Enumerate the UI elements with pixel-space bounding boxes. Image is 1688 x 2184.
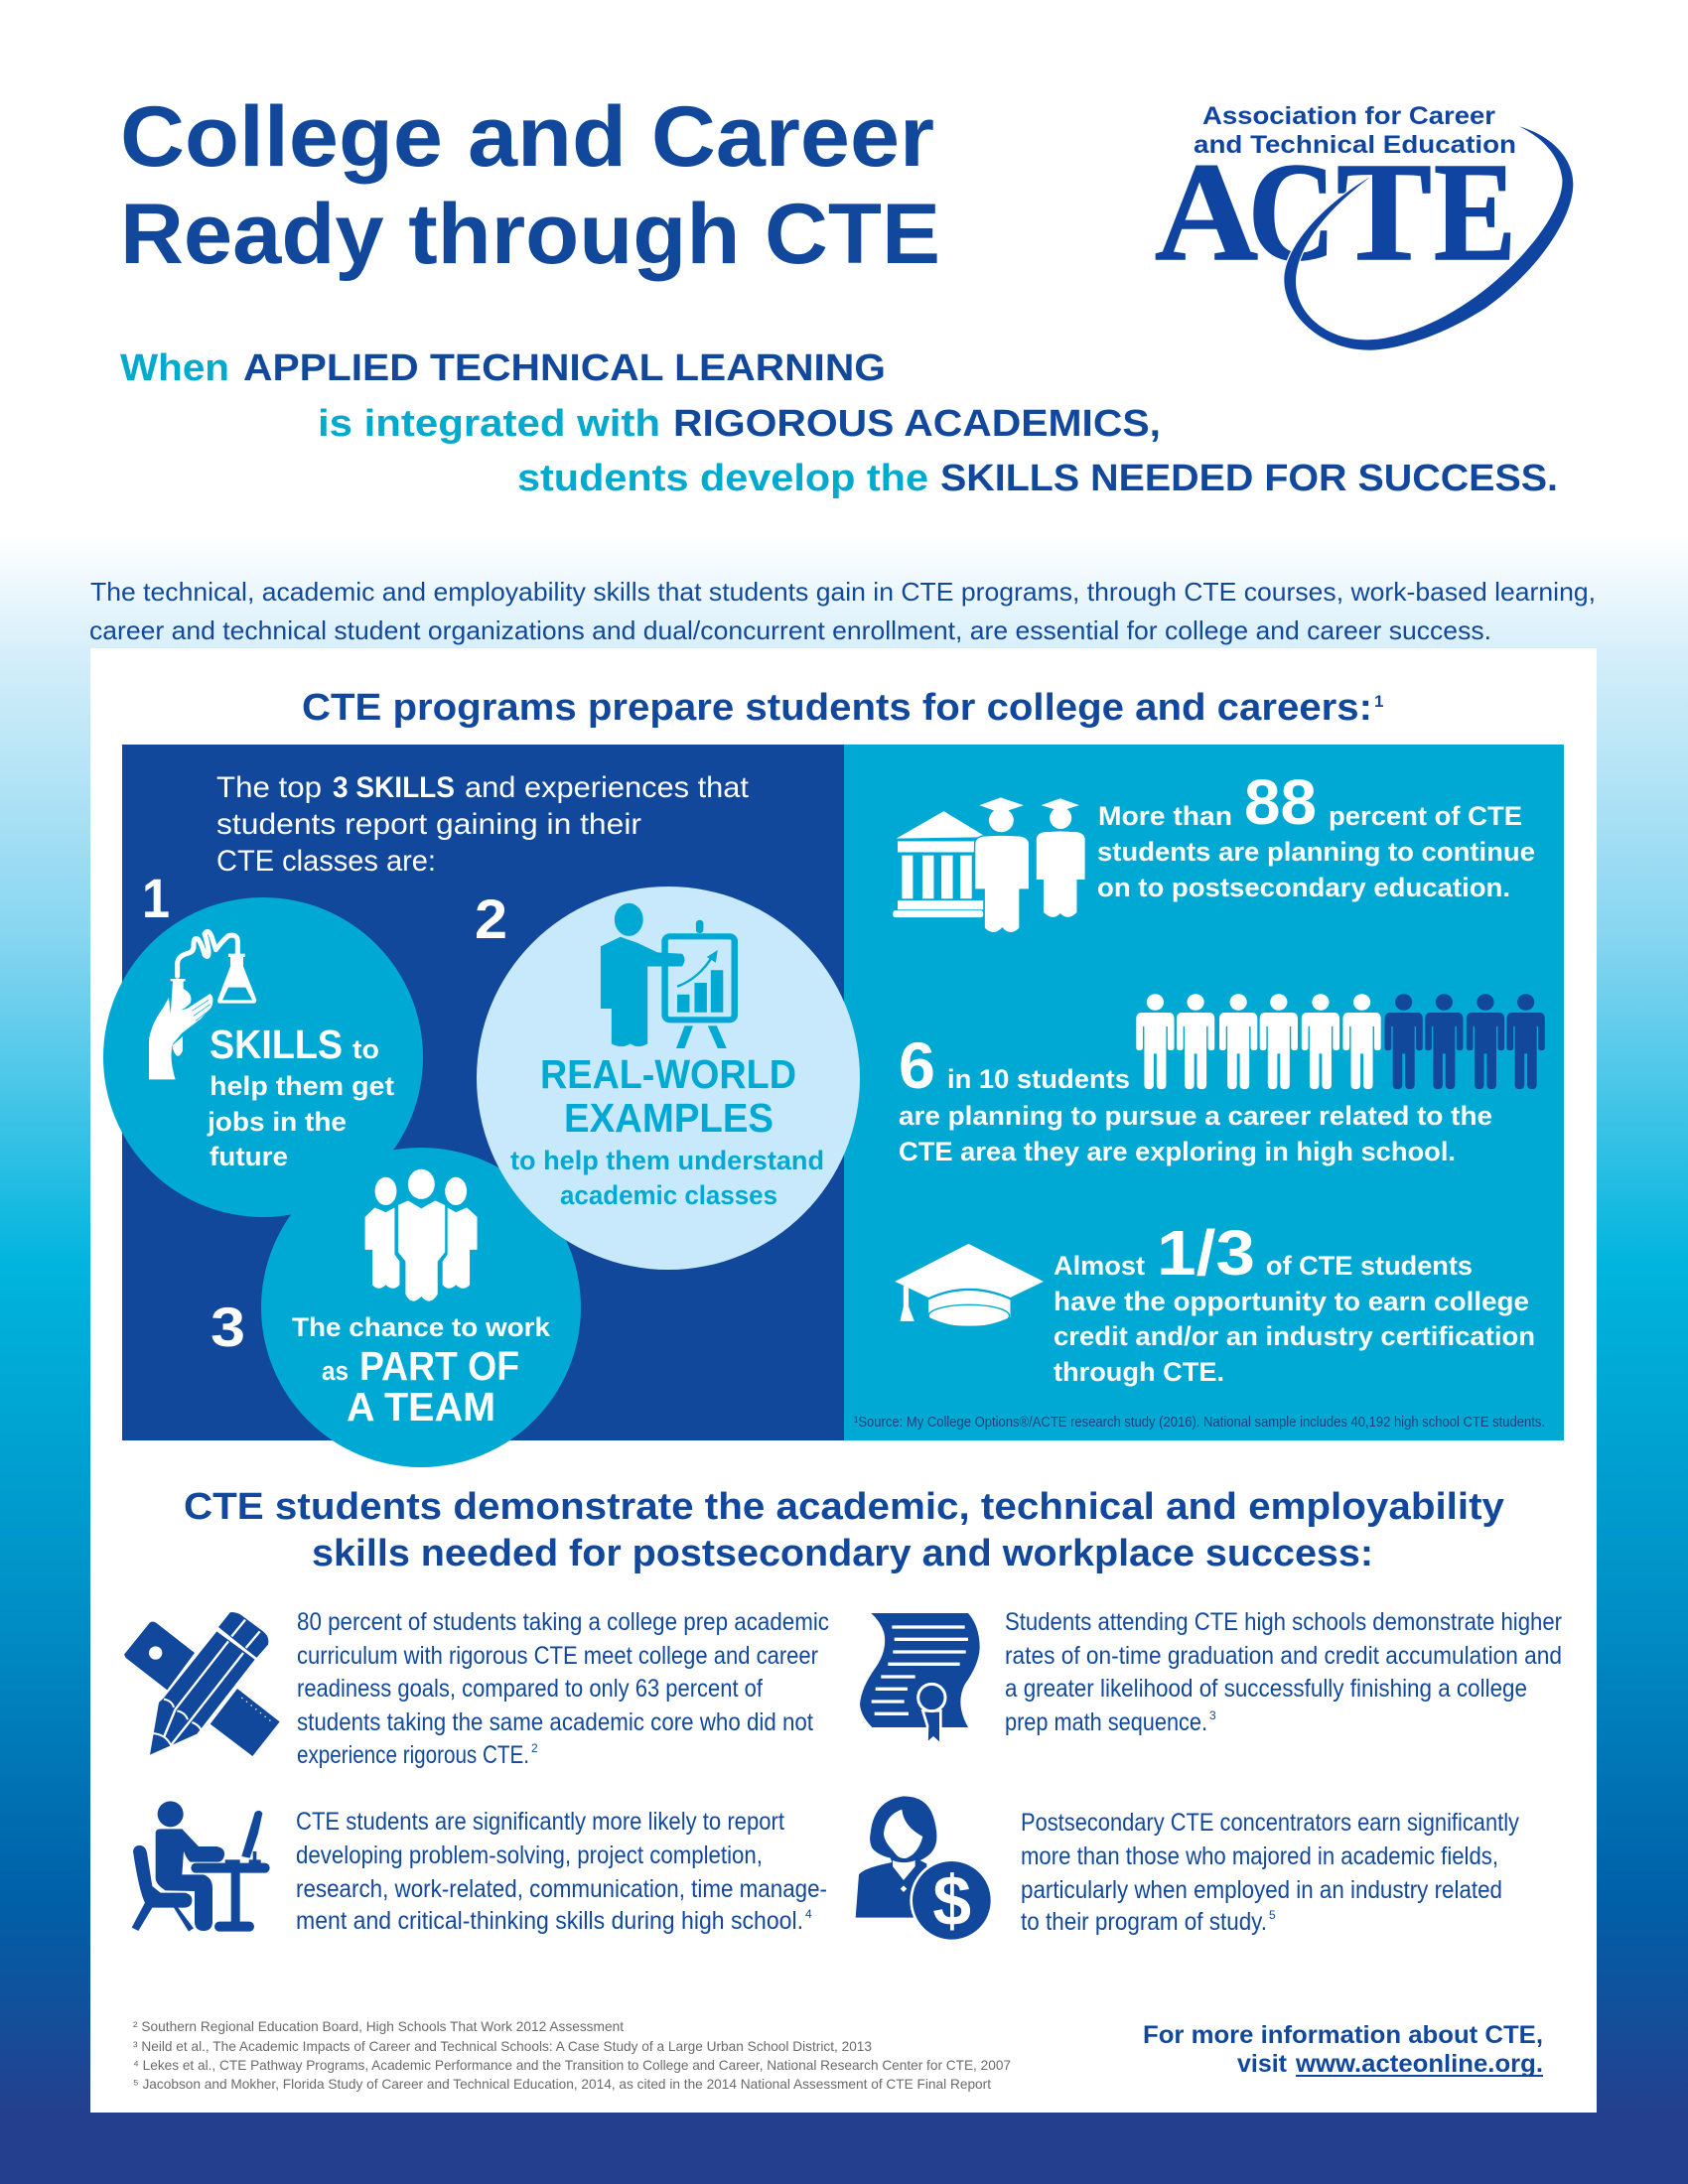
stat: 6 in 10 students: CTE area they are exploring in high school. bbox=[899, 1137, 1456, 1166]
stat: almost one third: have the opportunity to earn college bbox=[1054, 1287, 1529, 1316]
text: skills developed: ment and critical-thinking skills during high school. bbox=[296, 1907, 803, 1935]
stat: 88 percent: on to postsecondary education. bbox=[1097, 873, 1510, 902]
text: skills: SKILLS bbox=[210, 1022, 343, 1067]
stat: almost one third: 1/3 bbox=[1157, 1217, 1255, 1289]
call to action bbox=[1143, 2021, 1543, 2078]
intro text: top 3 skills: The top bbox=[216, 771, 322, 804]
intro text: top 3 skills: students report gaining in their bbox=[216, 808, 641, 841]
ACTE logo: Association for Career bbox=[1202, 102, 1495, 130]
number 1: 1 bbox=[142, 867, 170, 929]
section heading: programs prepare students: CTE programs prepare students for college and careers: bbox=[302, 687, 1372, 729]
text: high school outcomes bbox=[1005, 1608, 1562, 1736]
subheading bbox=[120, 347, 1558, 499]
text: part of a team: A TEAM bbox=[347, 1384, 495, 1430]
text: real-world examples: academic classes bbox=[560, 1180, 777, 1210]
text: college prep outcomes: readiness goals, compared to only 63 percent of bbox=[297, 1675, 763, 1703]
text: skills bbox=[207, 1022, 394, 1171]
ACTE logo: C bbox=[1248, 133, 1336, 290]
stat: almost one third: credit and/or an industry certification bbox=[1054, 1321, 1535, 1351]
stat: 88 percent: percent of CTE bbox=[1329, 801, 1522, 831]
text: high school outcomes: a greater likelihood of successfully finishing a college bbox=[1005, 1675, 1527, 1703]
stat: 88 percent: 88 bbox=[1244, 766, 1317, 838]
footnotes: ² Southern Regional Education Board, High Schools That Work 2012 Assessment bbox=[133, 2018, 624, 2034]
text: part of a team: The chance to work bbox=[292, 1312, 551, 1342]
subheading: RIGOROUS ACADEMICS, bbox=[673, 403, 1161, 445]
text: real-world examples: REAL-WORLD bbox=[540, 1051, 796, 1097]
number 2: 2 bbox=[475, 887, 507, 950]
text: college prep outcomes: experience rigorous CTE. bbox=[297, 1741, 529, 1769]
footnotes: ⁵ Jacobson and Mokher, Florida Study of Career and Technical Education, 2014, as cited in the 2014 National Assessment of CTE Final Report bbox=[133, 2076, 991, 2092]
subheading: APPLIED TECHNICAL LEARNING bbox=[243, 347, 886, 389]
icon: graduation cap bbox=[895, 1244, 1044, 1326]
text: college prep outcomes: curriculum with rigorous CTE meet college and career bbox=[297, 1642, 818, 1670]
text: high school outcomes: 3 bbox=[1209, 1708, 1216, 1722]
text: skills: jobs in the bbox=[207, 1107, 347, 1137]
text: skills: future bbox=[210, 1142, 288, 1171]
number 3: 3 bbox=[211, 1296, 245, 1358]
stat: 6 in 10 students: 6 bbox=[899, 1028, 935, 1102]
text: earnings: 5 bbox=[1269, 1908, 1276, 1922]
call to action: visit bbox=[1237, 2050, 1288, 2078]
intro text: top 3 skills: and experiences that bbox=[465, 771, 750, 804]
ACTE logo bbox=[1155, 102, 1573, 350]
text: college prep outcomes bbox=[297, 1608, 829, 1769]
text: skills developed: CTE students are significantly more likely to report bbox=[296, 1808, 784, 1836]
panel: top 3 skills bbox=[122, 745, 844, 1440]
stat: almost one third: of CTE students bbox=[1266, 1251, 1473, 1281]
text: part of a team bbox=[292, 1312, 551, 1430]
text: high school outcomes: prep math sequence. bbox=[1005, 1708, 1207, 1736]
text: earnings: to their program of study. bbox=[1021, 1908, 1267, 1936]
ACTE logo: and Technical Education bbox=[1194, 131, 1516, 159]
circle 1: skills bbox=[103, 867, 423, 1217]
title bbox=[120, 89, 940, 282]
section heading: programs prepare students: 1 bbox=[1374, 692, 1383, 711]
section heading: students demonstrate skills: CTE students demonstrate the academic, technical and employability bbox=[184, 1486, 1504, 1528]
text: part of a team: PART OF bbox=[359, 1343, 519, 1389]
text: high school outcomes: rates of on-time graduation and credit accumulation and bbox=[1005, 1642, 1562, 1670]
icon: woman with dollar coin bbox=[856, 1796, 993, 1942]
title: College and Career bbox=[120, 89, 934, 185]
intro text: top 3 skills bbox=[216, 771, 750, 878]
text: skills developed: developing problem-solving, project completion, bbox=[296, 1842, 763, 1869]
stat: 88 percent bbox=[1097, 766, 1535, 902]
section heading: students demonstrate skills: skills needed for postsecondary and workplace success: bbox=[312, 1533, 1373, 1574]
text: high school outcomes: Students attending CTE high schools demonstrate higher bbox=[1005, 1608, 1562, 1636]
text: earnings: particularly when employed in an industry related bbox=[1021, 1876, 1502, 1904]
stat: 88 percent: students are planning to continue bbox=[1097, 837, 1535, 867]
ACTE logo: A bbox=[1155, 133, 1258, 290]
text: skills: help them get bbox=[210, 1071, 394, 1101]
panel: statistics bbox=[844, 745, 1564, 1440]
intro text: top 3 skills: CTE classes are: bbox=[216, 845, 436, 878]
icon: presenter with chart bbox=[601, 903, 735, 1048]
icon: college building and graduates bbox=[893, 797, 1085, 933]
footnotes bbox=[133, 2018, 1011, 2092]
icon: team of three bbox=[365, 1169, 478, 1301]
stat: almost one third bbox=[1054, 1217, 1535, 1387]
subheading: When bbox=[120, 347, 229, 389]
stat: 6 in 10 students: in 10 students bbox=[947, 1064, 1130, 1094]
text: skills developed bbox=[296, 1808, 827, 1935]
circle 2: real-world examples bbox=[477, 887, 860, 1270]
ACTE logo: T bbox=[1336, 133, 1432, 290]
white content panel bbox=[90, 648, 1597, 2113]
text: skills: to bbox=[352, 1034, 379, 1064]
stat: 6 in 10 students: are planning to pursue a career related to the bbox=[899, 1101, 1492, 1131]
call to action: www.acteonline.org. bbox=[1295, 2050, 1543, 2078]
stat: almost one third: through CTE. bbox=[1054, 1357, 1224, 1387]
text: earnings: more than those who majored in academic fields, bbox=[1021, 1843, 1498, 1870]
subheading: is integrated with bbox=[318, 403, 660, 445]
icon: row of 10 students, 6 highlighted bbox=[1136, 994, 1545, 1089]
source note: ¹Source: My College Options®/ACTE research study (2016). National sample includes 40,192 high school CTE students. bbox=[854, 1414, 1545, 1431]
text: earnings bbox=[1021, 1809, 1519, 1936]
icon: pencils and ruler bbox=[124, 1612, 280, 1756]
call to action: For more information about CTE, bbox=[1143, 2021, 1543, 2049]
subheading: students develop the bbox=[517, 458, 928, 499]
intro paragraph: career and technical student organizations and dual/concurrent enrollment, are essential for college and career success. bbox=[89, 615, 1491, 645]
stat: 88 percent: More than bbox=[1098, 801, 1232, 831]
icon: diploma bbox=[860, 1613, 980, 1744]
ACTE logo: E bbox=[1434, 133, 1516, 290]
text: college prep outcomes: 80 percent of students taking a college prep academic bbox=[297, 1608, 829, 1636]
footnotes: ³ Neild et al., The Academic Impacts of Career and Technical Schools: A Case Study of a Large Urban School District, 2013 bbox=[133, 2038, 872, 2054]
text: part of a team: as bbox=[322, 1356, 349, 1386]
icon: woman with dollar coin: $ bbox=[932, 1861, 971, 1941]
icon: student at computer bbox=[132, 1801, 270, 1932]
intro paragraph bbox=[89, 577, 1596, 645]
icon: hand with lab flask bbox=[149, 931, 256, 1079]
text: skills developed: 4 bbox=[805, 1907, 812, 1921]
subheading: SKILLS NEEDED FOR SUCCESS. bbox=[940, 458, 1558, 499]
stat: almost one third: Almost bbox=[1054, 1251, 1145, 1281]
text: real-world examples: EXAMPLES bbox=[564, 1095, 774, 1141]
text: skills developed: research, work-related, communication, time manage- bbox=[296, 1875, 827, 1903]
intro paragraph: The technical, academic and employability skills that students gain in CTE programs, through CTE courses, work-based learning, bbox=[90, 577, 1596, 607]
title: Ready through CTE bbox=[120, 187, 940, 282]
footnotes: ⁴ Lekes et al., CTE Pathway Programs, Academic Performance and the Transition to College and Career, National Research Center for CTE, 2007 bbox=[133, 2057, 1011, 2073]
text: real-world examples bbox=[510, 1051, 824, 1210]
text: real-world examples: to help them understand bbox=[510, 1146, 824, 1175]
text: college prep outcomes: students taking the same academic core who did not bbox=[297, 1708, 813, 1736]
text: college prep outcomes: 2 bbox=[531, 1741, 538, 1755]
circle 3: team bbox=[261, 1148, 581, 1467]
text: earnings: Postsecondary CTE concentrators earn significantly bbox=[1021, 1809, 1519, 1837]
intro text: top 3 skills: 3 SKILLS bbox=[333, 771, 455, 804]
section heading: students demonstrate skills bbox=[184, 1486, 1504, 1574]
stat: 6 in 10 students bbox=[899, 1028, 1492, 1166]
